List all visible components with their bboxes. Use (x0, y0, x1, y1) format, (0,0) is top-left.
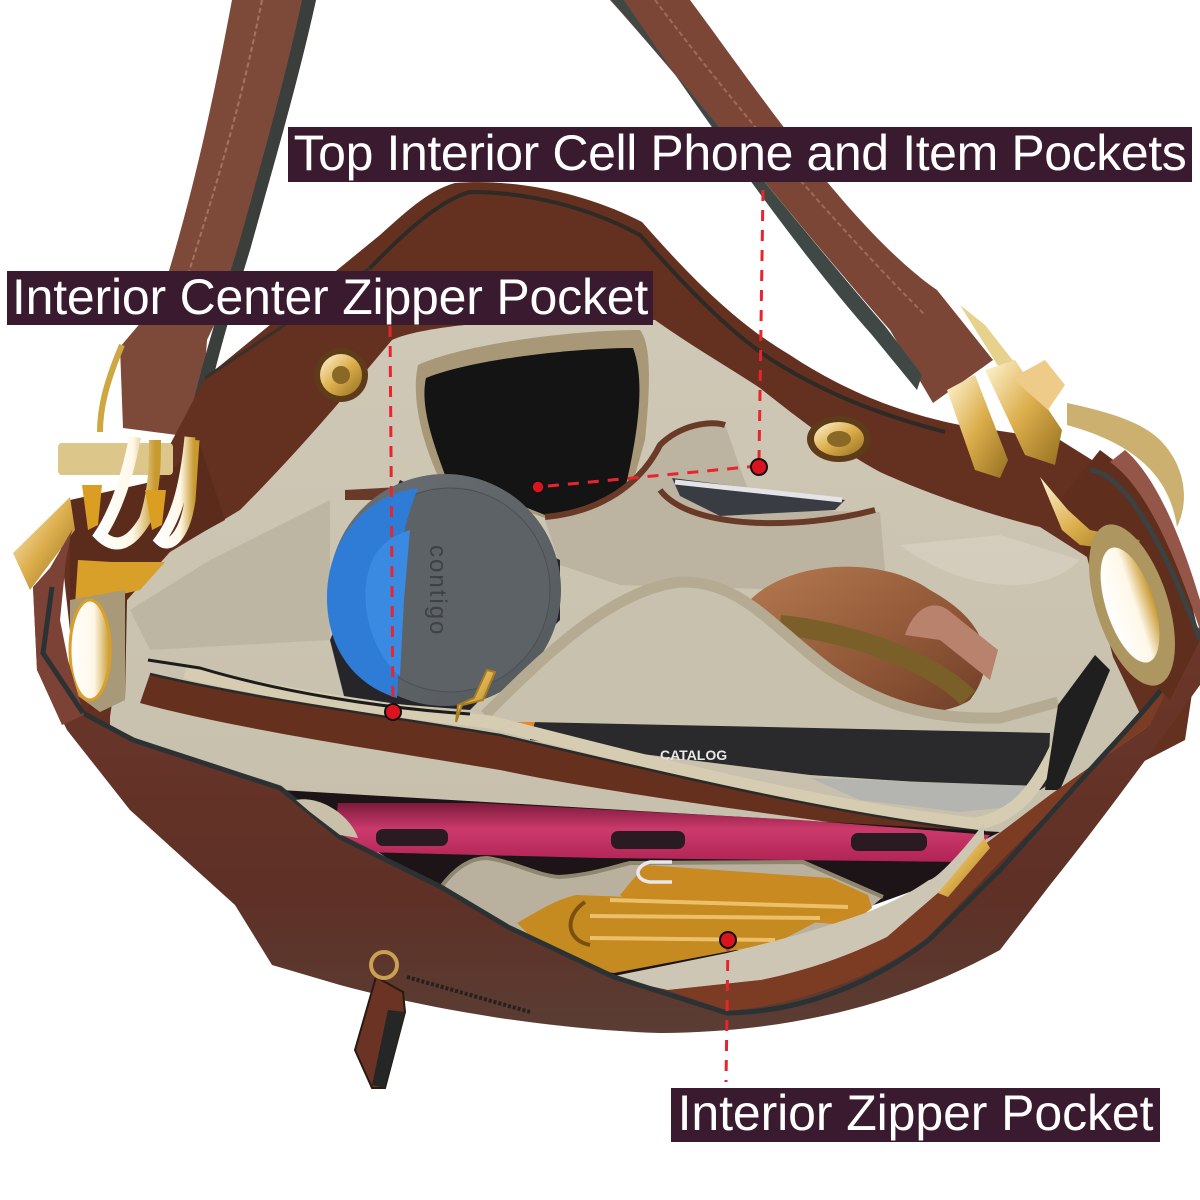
right shoulder strap (602, 0, 993, 403)
silver hardware on front right (938, 838, 990, 897)
label: interior center zipper pocket: Interior Center Zipper Pocket (12, 269, 648, 325)
travel mug: contigo (424, 545, 451, 636)
dashed leader: top pockets (532, 190, 767, 493)
gold snap: left (314, 348, 368, 402)
black book (488, 722, 1050, 812)
left gold hardware (13, 345, 225, 712)
bag interior lining (110, 319, 1150, 880)
zipper pocket front panel (140, 655, 1150, 860)
black book: CATALOG (660, 747, 727, 763)
interior zipper pocket lining (441, 858, 883, 950)
left shoulder strap (120, 0, 316, 438)
copper pouch (750, 567, 998, 714)
label: interior zipper pocket: Interior Zipper Pocket (678, 1085, 1153, 1141)
cell phone (416, 330, 649, 518)
label: top interior pockets: Top Interior Cell Phone and Item Pockets (294, 125, 1186, 181)
stud on front left (296, 799, 358, 838)
dashed leader: interior zipper (720, 932, 736, 1082)
right gold hardware (947, 305, 1200, 700)
front leather wall (33, 570, 1200, 1033)
pink tablet (335, 803, 990, 862)
center zipper pocket interior (485, 582, 1060, 780)
cards in pocket (672, 478, 845, 516)
wallet (517, 862, 872, 973)
front interior lining strip (609, 823, 984, 990)
gold snap: right (807, 416, 871, 462)
dark lower cavity (280, 790, 1000, 980)
front zipper pull (355, 952, 530, 1088)
back leather panel (60, 182, 1200, 810)
dashed leader: center zipper (385, 326, 401, 720)
left leather rim (33, 530, 84, 725)
travel mug (327, 474, 561, 710)
top interior pockets (545, 423, 885, 590)
